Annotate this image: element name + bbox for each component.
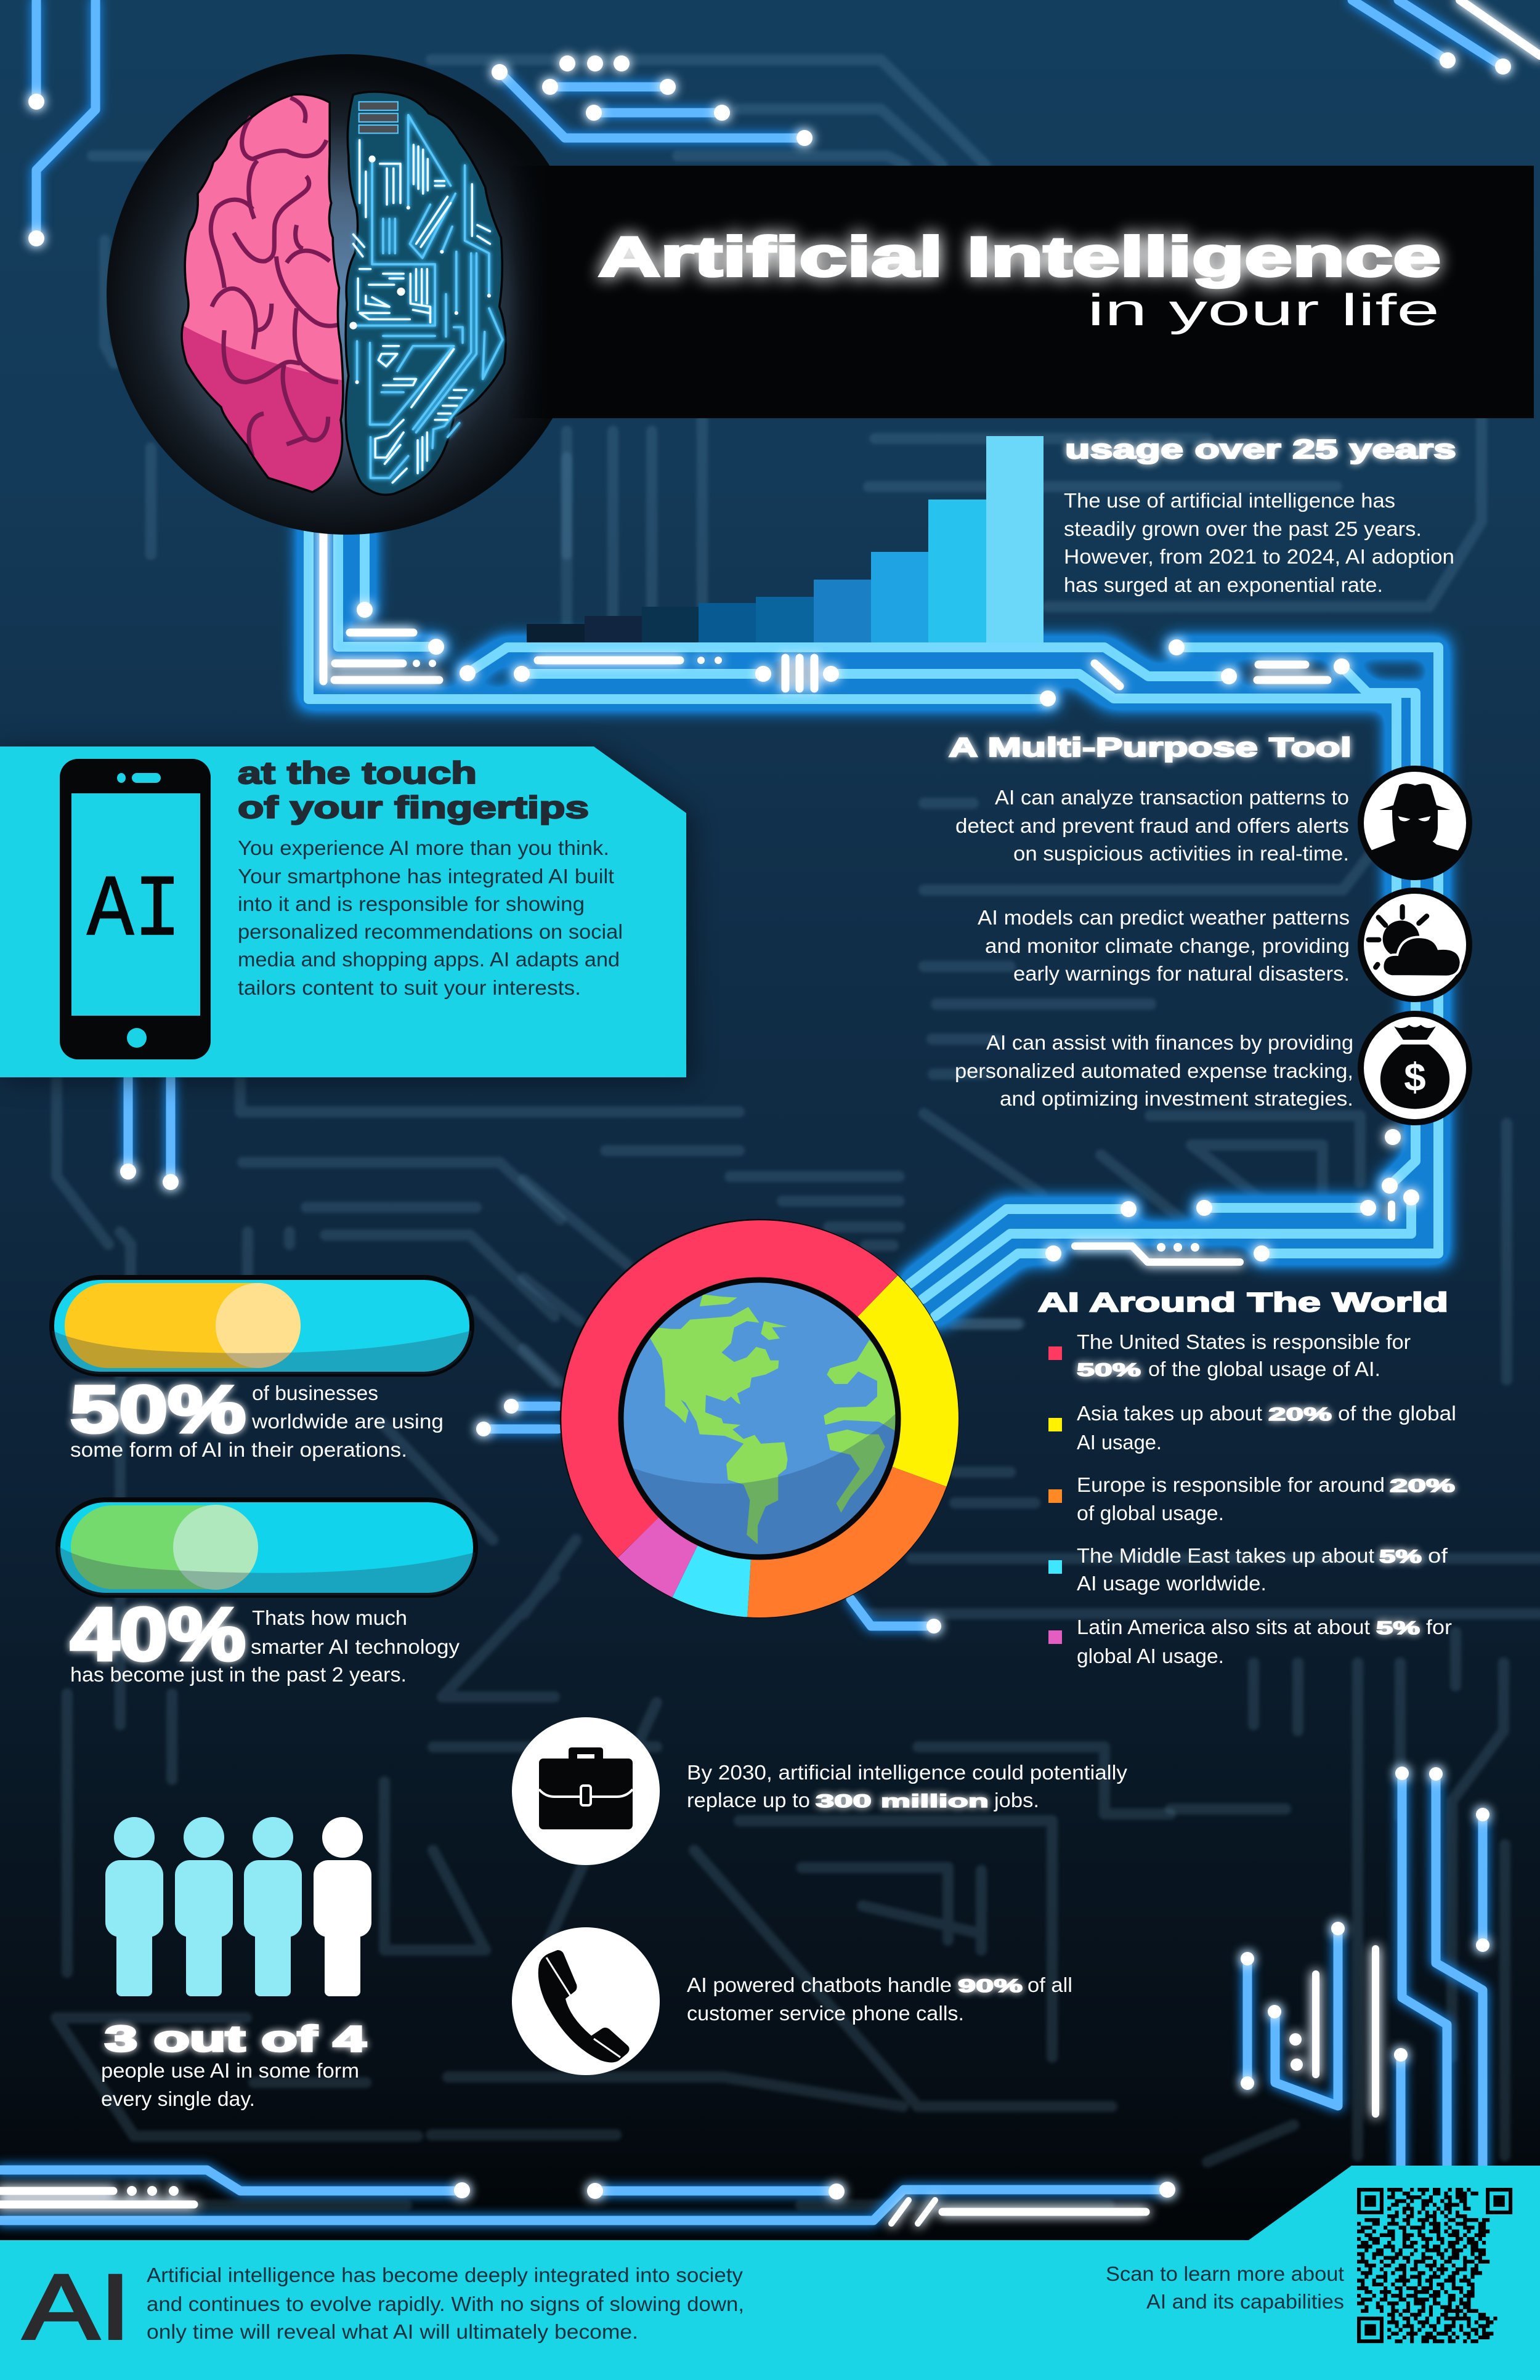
logo: AI: AI [23, 2255, 131, 2358]
body: steadily grown over the past 25 years. [1064, 517, 1422, 540]
body: into it and is responsible for showing [238, 892, 585, 915]
icon: brain [177, 92, 506, 501]
legend item: united states: of the global usage of AI. [1148, 1358, 1380, 1380]
text: AI powered chatbots handle [687, 1973, 952, 1996]
body: Your smartphone has integrated AI built [238, 865, 614, 888]
text [687, 1761, 1128, 1811]
legend item: united states: The United States is responsible for [1077, 1330, 1411, 1353]
legend item: asia [1048, 1402, 1456, 1454]
text: customer service phone calls. [687, 2002, 964, 2025]
text: fraud detection: AI can analyze transaction patterns to [995, 786, 1349, 809]
heading [238, 756, 589, 825]
legend item: latin america [1048, 1616, 1452, 1667]
caption: of businesses [252, 1382, 378, 1404]
caption: has become just in the past 2 years. [70, 1663, 407, 1686]
heading: of your fingertips [238, 790, 589, 825]
text block: usage over 25 years [1064, 434, 1456, 596]
text: finances: AI can assist with finances by providing [986, 1031, 1353, 1054]
donut segments [592, 1251, 928, 1587]
stat: chatbots 90% [512, 1927, 1072, 2075]
legend item: middle east: The Middle East takes up about [1077, 1544, 1374, 1567]
text: jobs. [994, 1789, 1039, 1811]
stat: 40% smarter [58, 1500, 476, 1686]
brain medallion [107, 54, 587, 535]
text: finances [955, 1031, 1353, 1110]
caption [70, 1606, 460, 1686]
body [238, 836, 623, 999]
legend item: asia: 20% [1268, 1404, 1332, 1425]
legend item: asia: of the global [1338, 1402, 1456, 1425]
number: 3 out of 4 [105, 2019, 366, 2059]
text: replace up to [687, 1789, 810, 1811]
title: Artificial Intelligence [598, 226, 1441, 288]
donut chart and globe [560, 1219, 959, 1618]
body [1064, 489, 1454, 596]
heading: A Multi-Purpose Tool [949, 732, 1352, 763]
heading: usage over 25 years [1065, 434, 1456, 464]
legend item: europe: of global usage. [1077, 1502, 1224, 1524]
subtitle: in your life [1087, 286, 1440, 335]
panel: ai around the world [1038, 1287, 1456, 1667]
scan caption: Scan to learn more about [1106, 2262, 1344, 2285]
body: personalized recommendations on social [238, 920, 623, 943]
progress bar 50% [52, 1277, 472, 1380]
scan caption: AI and its capabilities [1146, 2290, 1344, 2313]
caption: people use AI in some form [101, 2059, 359, 2082]
closing statement: and continues to evolve rapidly. With no signs of slowing down, [147, 2293, 744, 2315]
icon: smartphone: AI [87, 862, 181, 961]
text: 90% [958, 1976, 1023, 1996]
text: weather: and monitor climate change, providing [985, 934, 1350, 957]
stat: 3 out of 4 people [101, 1817, 371, 2110]
caption: smarter AI technology [251, 1635, 460, 1658]
stat: 300 million jobs [512, 1717, 1128, 1865]
legend item: middle east [1048, 1544, 1448, 1595]
closing statement [147, 2264, 744, 2343]
legend item: united states [1048, 1330, 1411, 1380]
body: tailors content to suit your interests. [238, 976, 581, 999]
legend item: latin america: 5% [1376, 1618, 1420, 1638]
icon: briefcase [512, 1717, 660, 1865]
text: weather: AI models can predict weather patterns [978, 906, 1350, 929]
text: fraud detection [955, 786, 1349, 865]
icon: telephone [512, 1927, 660, 2075]
footer band [0, 2166, 1540, 2380]
caption: some form of AI in their operations. [70, 1438, 407, 1461]
caption [101, 2059, 359, 2110]
heading: AI Around The World [1038, 1287, 1448, 1318]
body: You experience AI more than you think. [238, 836, 609, 859]
legend item: asia: Asia takes up about [1077, 1402, 1262, 1425]
closing statement: only time will reveal what AI will ultimately become. [147, 2320, 638, 2343]
icon: sun and cloud [1361, 891, 1469, 999]
legend item: united states: 50% [1077, 1360, 1141, 1380]
caption: Thats how much [252, 1606, 407, 1629]
title banner [549, 166, 1534, 418]
closing statement: Artificial intelligence has become deeply integrated into society [147, 2264, 744, 2286]
icon: four people [105, 1817, 371, 1996]
caption: worldwide are using [251, 1410, 444, 1433]
icon: smartphone [60, 759, 211, 1059]
body: However, from 2021 to 2024, AI adoption [1064, 545, 1454, 568]
legend item: europe: 20% [1390, 1476, 1455, 1496]
icon: money bag [1361, 1014, 1469, 1122]
body: The use of artificial intelligence has [1064, 489, 1395, 512]
text: By 2030, artificial intelligence could potentially [687, 1761, 1128, 1784]
stat: 50% of businesses [52, 1277, 472, 1461]
legend item: middle east: of [1428, 1544, 1448, 1567]
text: fraud detection: detect and prevent fraud and offers alerts [955, 814, 1349, 837]
body: has surged at an exponential rate. [1064, 573, 1383, 596]
caption: every single day. [101, 2087, 255, 2110]
legend item: middle east: AI usage worldwide. [1077, 1572, 1266, 1595]
panel: a multi-purpose tool [949, 732, 1469, 1122]
text: 300 million [816, 1791, 989, 1811]
text: fraud detection: on suspicious activities in real-time. [1013, 842, 1349, 865]
text [687, 1973, 1072, 2025]
text: weather [978, 906, 1350, 985]
legend item: asia: AI usage. [1077, 1431, 1162, 1454]
circuit traces: central board [309, 524, 1438, 1316]
circuit right hemisphere [346, 92, 506, 495]
heading: at the touch [238, 756, 477, 790]
legend item: latin america: global AI usage. [1077, 1645, 1224, 1667]
legend item: middle east: 5% [1379, 1547, 1422, 1567]
icon: money bag: $ [1404, 1054, 1426, 1099]
number: 40% [70, 1592, 246, 1676]
bar chart: usage over 25 years [527, 436, 1044, 642]
qr code [1357, 2188, 1512, 2343]
progress bar 40% [58, 1500, 476, 1601]
icon: spy [1361, 769, 1469, 878]
organic left hemisphere [177, 94, 344, 501]
text: of all [1027, 1973, 1072, 1996]
text: finances: personalized automated expense tracking, [955, 1059, 1353, 1082]
legend item: europe: Europe is responsible for around [1077, 1473, 1385, 1496]
icon: globe [618, 1280, 907, 1579]
body: media and shopping apps. AI adapts and [238, 948, 620, 971]
text: finances: and optimizing investment strategies. [1000, 1087, 1353, 1110]
caption [70, 1382, 444, 1461]
text: weather: early warnings for natural disasters. [1013, 962, 1350, 985]
number: 50% [70, 1372, 246, 1446]
legend item: latin america: for [1426, 1616, 1452, 1638]
legend item: latin america: Latin America also sits at about [1077, 1616, 1370, 1638]
legend item: europe [1048, 1473, 1455, 1524]
scan caption [1106, 2262, 1344, 2313]
panel: at the touch of your fingertips [0, 747, 691, 1081]
